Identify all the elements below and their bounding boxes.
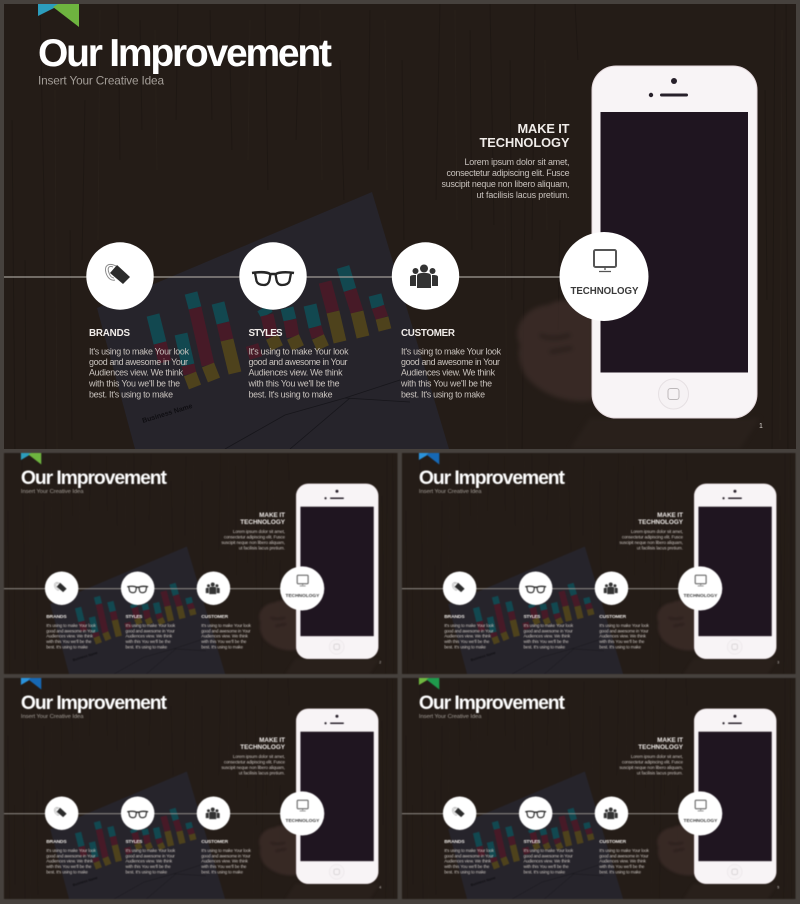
text block: make it technology: TECHNOLOGY	[240, 744, 286, 751]
column: brands: with this You we'll be the	[88, 379, 180, 389]
column: brands: good and awesome in Your	[46, 628, 96, 633]
node: customer	[595, 796, 628, 830]
node: technology	[560, 232, 648, 321]
column: styles: best. It's using to make	[126, 644, 168, 649]
timeline line	[4, 813, 281, 815]
column: customer: CUSTOMER	[599, 614, 627, 620]
column: customer: best. It's using to make	[401, 389, 485, 399]
subtitle: Insert Your Creative Idea	[38, 74, 164, 88]
column: customer: good and awesome in Your	[201, 628, 251, 633]
column: customer: good and awesome in Your	[401, 357, 500, 367]
node: styles	[519, 796, 552, 830]
subtitle: Insert Your Creative Idea	[21, 714, 84, 720]
text block: make it technology: consectetur adipiscing elit. Fusce	[224, 534, 286, 539]
column: brands: best. It's using to make	[89, 389, 173, 399]
column: styles: with this You we'll be the	[126, 864, 171, 869]
text block: make it technology: consectetur adipiscing elit. Fusce	[622, 534, 684, 539]
column: customer: Audiences view. We think	[401, 368, 496, 378]
column: styles: with this You we'll be the	[248, 379, 340, 389]
text block: make it technology: TECHNOLOGY	[480, 135, 570, 150]
column: styles: with this You we'll be the	[524, 639, 569, 644]
column: customer: CUSTOMER	[201, 839, 229, 845]
node: brands	[45, 796, 78, 830]
column: brands: Audiences view. We think	[444, 634, 492, 639]
column: customer: CUSTOMER	[201, 614, 229, 620]
timeline line	[402, 588, 679, 590]
column: styles: good and awesome in Your	[126, 628, 175, 633]
panel: slide 2	[4, 452, 398, 674]
column: styles	[126, 614, 176, 649]
text block: make it technology: ut facilisis lacus pretium.	[637, 545, 683, 550]
column: brands: BRANDS	[46, 614, 67, 620]
column: customer	[201, 839, 252, 874]
page number: 3	[777, 661, 779, 665]
column: customer: with this You we'll be the	[400, 379, 492, 389]
title: Our Improvement	[21, 467, 168, 489]
column: customer: It's using to make Your look	[599, 623, 650, 628]
node: brands	[443, 571, 476, 605]
text block: make it technology: consectetur adipiscing elit. Fusce	[622, 759, 684, 764]
text block: make it technology: ut facilisis lacus pretium.	[239, 545, 285, 550]
column: styles: best. It's using to make	[524, 869, 566, 874]
column: styles	[524, 614, 574, 649]
column: brands: It's using to make Your look	[444, 623, 495, 628]
column: styles: best. It's using to make	[524, 644, 566, 649]
column: brands	[46, 614, 97, 649]
text block: make it technology: TECHNOLOGY	[638, 519, 684, 526]
timeline line	[402, 813, 679, 815]
column: brands: best. It's using to make	[444, 644, 487, 649]
text block: make it technology: MAKE IT	[657, 512, 683, 519]
column: styles: It's using to make Your look	[126, 623, 176, 628]
node: technology: TECHNOLOGY	[684, 818, 718, 824]
column: brands: Audiences view. We think	[46, 859, 94, 864]
timeline line	[4, 276, 562, 278]
column: customer: best. It's using to make	[599, 869, 642, 874]
phone mockup	[296, 709, 378, 884]
text block: make it technology: suscipit neque non libero aliquam,	[619, 765, 683, 770]
column: brands: Audiences view. We think	[444, 859, 492, 864]
text block: make it technology	[619, 512, 684, 550]
column: brands: It's using to make Your look	[89, 346, 190, 356]
text block: make it technology: Lorem ipsum dolor sit amet,	[233, 754, 285, 759]
column: styles: It's using to make Your look	[524, 848, 574, 853]
column: customer: with this You we'll be the	[201, 639, 247, 644]
column: customer	[201, 614, 252, 649]
column: brands	[444, 839, 495, 874]
column: styles: It's using to make Your look	[248, 346, 349, 356]
column: customer: CUSTOMER	[401, 328, 455, 339]
column: brands: best. It's using to make	[46, 869, 89, 874]
subtitle: Insert Your Creative Idea	[21, 489, 84, 495]
column: styles	[524, 839, 574, 874]
column: brands: BRANDS	[444, 614, 465, 620]
panel: slide 3	[402, 452, 796, 674]
column: styles: STYLES	[126, 839, 143, 845]
column: customer: with this You we'll be the	[201, 864, 247, 869]
column: styles: STYLES	[524, 614, 541, 620]
column: styles: best. It's using to make	[248, 389, 333, 399]
column: styles: good and awesome in Your	[524, 628, 573, 633]
column: brands: best. It's using to make	[46, 644, 89, 649]
column: customer: with this You we'll be the	[599, 639, 645, 644]
column: customer: Audiences view. We think	[201, 634, 249, 639]
column: brands	[46, 839, 97, 874]
background photo: wood, report, hand	[402, 678, 796, 899]
column: customer: Audiences view. We think	[599, 859, 647, 864]
text block: make it technology: ut facilisis lacus pretium.	[239, 770, 285, 775]
column: brands: BRANDS	[89, 328, 130, 339]
text block: make it technology: suscipit neque non libero aliquam,	[221, 765, 285, 770]
column: styles: Audiences view. We think	[524, 634, 571, 639]
title: Our Improvement	[21, 692, 168, 714]
background photo: wood, report, hand	[402, 453, 796, 674]
corner ribbon	[21, 453, 41, 464]
node: brands	[86, 242, 154, 310]
column: brands: Audiences view. We think	[89, 368, 184, 378]
node: customer	[197, 571, 230, 605]
column: styles: good and awesome in Your	[126, 853, 175, 858]
column: styles: Audiences view. We think	[248, 368, 343, 378]
column: customer	[599, 614, 650, 649]
column: styles: good and awesome in Your	[248, 357, 348, 367]
node: technology	[280, 791, 324, 836]
subtitle: Insert Your Creative Idea	[419, 714, 482, 720]
column: customer: It's using to make Your look	[201, 623, 252, 628]
column: brands: good and awesome in Your	[89, 357, 188, 367]
column: brands: BRANDS	[46, 839, 67, 845]
node: technology	[678, 566, 722, 611]
node: technology: TECHNOLOGY	[286, 593, 320, 599]
column: customer: good and awesome in Your	[201, 853, 251, 858]
text block: make it technology: Lorem ipsum dolor sit amet,	[233, 529, 285, 534]
column: customer: It's using to make Your look	[401, 346, 502, 356]
column: brands: good and awesome in Your	[444, 853, 494, 858]
title: Our Improvement	[419, 467, 566, 489]
text block: make it technology: Lorem ipsum dolor sit amet,	[631, 529, 683, 534]
corner ribbon	[419, 453, 439, 464]
corner ribbon	[38, 4, 79, 27]
text block: make it technology: suscipit neque non libero aliquam,	[619, 540, 683, 545]
column: styles: Audiences view. We think	[524, 859, 571, 864]
text block: make it technology: TECHNOLOGY	[638, 744, 684, 751]
text block: make it technology: suscipit neque non libero aliquam,	[442, 179, 570, 189]
timeline line	[4, 588, 281, 590]
text block: make it technology	[619, 737, 684, 775]
column: customer: best. It's using to make	[599, 644, 642, 649]
text block: make it technology: TECHNOLOGY	[240, 519, 286, 526]
column: styles: STYLES	[126, 614, 143, 620]
text block: make it technology: Lorem ipsum dolor sit amet,	[631, 754, 683, 759]
panel: slide 4	[4, 677, 398, 900]
column: brands	[444, 614, 495, 649]
column: brands	[88, 328, 190, 399]
column: brands: with this You we'll be the	[444, 864, 490, 869]
background photo: wood, report, hand	[4, 678, 398, 899]
phone mockup	[694, 709, 776, 884]
column: brands: with this You we'll be the	[46, 639, 92, 644]
column: customer	[400, 328, 502, 399]
corner ribbon	[419, 678, 439, 689]
phone mockup	[592, 66, 757, 418]
background photo: wood, report, hand	[4, 4, 796, 449]
column: customer: good and awesome in Your	[599, 628, 649, 633]
background photo: wood, report, hand	[4, 453, 398, 674]
column: customer	[599, 839, 650, 874]
column: customer: Audiences view. We think	[599, 634, 647, 639]
column: customer: best. It's using to make	[201, 644, 244, 649]
text block: make it technology: Lorem ipsum dolor sit amet,	[464, 157, 570, 167]
text block: make it technology	[221, 512, 286, 550]
node: styles	[121, 571, 154, 605]
node: technology: TECHNOLOGY	[684, 593, 718, 599]
column: brands: Audiences view. We think	[46, 634, 94, 639]
column: brands: It's using to make Your look	[46, 848, 97, 853]
node: brands	[443, 796, 476, 830]
text block: make it technology: ut facilisis lacus pretium.	[637, 770, 683, 775]
text block: make it technology: MAKE IT	[657, 737, 683, 744]
column: styles: STYLES	[248, 328, 283, 339]
text block: make it technology	[442, 121, 570, 200]
column: styles: STYLES	[524, 839, 541, 845]
node: technology	[280, 566, 324, 611]
node: technology: TECHNOLOGY	[570, 286, 639, 297]
page number: 2	[379, 661, 381, 665]
column: styles: It's using to make Your look	[524, 623, 574, 628]
title: Our Improvement	[38, 32, 332, 75]
text block: make it technology: MAKE IT	[518, 121, 570, 136]
column: brands: It's using to make Your look	[444, 848, 495, 853]
text block: make it technology	[221, 737, 286, 775]
phone mockup	[296, 484, 378, 659]
column: brands: It's using to make Your look	[46, 623, 97, 628]
column: customer: Audiences view. We think	[201, 859, 249, 864]
text block: make it technology: consectetur adipiscing elit. Fusce	[446, 168, 570, 178]
node: styles	[519, 571, 552, 605]
text block: make it technology: suscipit neque non libero aliquam,	[221, 540, 285, 545]
text block: make it technology: MAKE IT	[259, 512, 285, 519]
column: customer: with this You we'll be the	[599, 864, 645, 869]
page number: 1	[759, 423, 763, 430]
node: styles	[239, 242, 307, 310]
subtitle: Insert Your Creative Idea	[419, 489, 482, 495]
column: brands: with this You we'll be the	[444, 639, 490, 644]
column: brands: good and awesome in Your	[444, 628, 494, 633]
column: brands: good and awesome in Your	[46, 853, 96, 858]
column: customer: CUSTOMER	[599, 839, 627, 845]
node: brands	[45, 571, 78, 605]
column: styles	[248, 328, 349, 399]
node: customer	[392, 242, 459, 310]
column: brands: with this You we'll be the	[46, 864, 92, 869]
node: styles	[121, 796, 154, 830]
text block: make it technology: ut facilisis lacus pretium.	[476, 190, 570, 200]
column: customer: It's using to make Your look	[599, 848, 650, 853]
column: brands: BRANDS	[444, 839, 465, 845]
column: styles: with this You we'll be the	[524, 864, 569, 869]
column: styles	[126, 839, 176, 874]
column: styles: Audiences view. We think	[126, 859, 173, 864]
text block: make it technology: MAKE IT	[259, 737, 285, 744]
panel: slide 5	[402, 677, 796, 900]
corner ribbon	[21, 678, 41, 689]
page number: 4	[379, 886, 381, 890]
column: styles: Audiences view. We think	[126, 634, 173, 639]
node: customer	[595, 571, 628, 605]
column: styles: good and awesome in Your	[524, 853, 573, 858]
column: customer: best. It's using to make	[201, 869, 244, 874]
column: styles: It's using to make Your look	[126, 848, 176, 853]
column: styles: with this You we'll be the	[126, 639, 171, 644]
node: technology	[678, 791, 722, 836]
column: customer: It's using to make Your look	[201, 848, 252, 853]
text block: make it technology: consectetur adipiscing elit. Fusce	[224, 759, 286, 764]
panel: slide 1	[4, 4, 796, 449]
node: technology: TECHNOLOGY	[286, 818, 320, 824]
column: customer: good and awesome in Your	[599, 853, 649, 858]
column: brands: best. It's using to make	[444, 869, 487, 874]
node: customer	[197, 796, 230, 830]
page number: 5	[777, 886, 779, 890]
phone mockup	[694, 484, 776, 659]
column: styles: best. It's using to make	[126, 869, 168, 874]
title: Our Improvement	[419, 692, 566, 714]
